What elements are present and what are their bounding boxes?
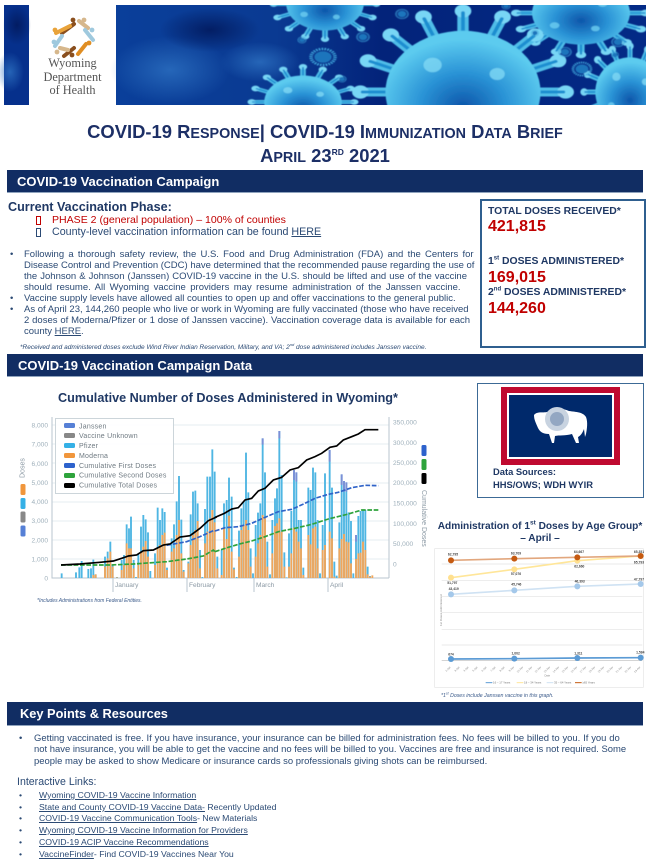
section bar: vaccination campaign: COVID-19 Vaccination Campaign (17, 174, 219, 189)
date axis labels: 9-Apr (508, 665, 515, 673)
right axis labels (393, 420, 417, 568)
bullet text (10, 249, 474, 337)
data sources text: HHS/OWS; WDH WYIR (493, 479, 593, 490)
legend: Cumulative Total Doses (79, 482, 158, 490)
first doses administered (488, 255, 624, 286)
series: 18 to 34 years (448, 553, 644, 581)
left axis labels: 5,000 (31, 480, 48, 487)
month labels: April (330, 582, 344, 589)
total doses received: TOTAL DOSES RECEIVED* (488, 206, 621, 217)
data labels: 45,746 (511, 583, 522, 587)
month labels: March (256, 582, 275, 589)
legend: Pfizer (79, 443, 99, 450)
panel: interactive links (19, 790, 276, 859)
legend: Vaccine Unknown (79, 433, 138, 440)
series: 35 to 64 years (448, 581, 644, 597)
daily dose bars, left half (62, 449, 215, 578)
data labels: 1,584 (636, 651, 645, 655)
panel: interactive links: COVID-19 ACIP Vaccine Recommendations (39, 837, 209, 847)
right axis labels: 200,000 (393, 480, 417, 487)
right axis labels: 100,000 (393, 521, 417, 528)
date axis labels: 2-Apr (444, 665, 452, 673)
age chart footnote: *1st Doses include Janssen vaccine in this graph. (441, 691, 554, 699)
date axis labels: 20-Apr (606, 665, 614, 674)
combined bar and line chart (20, 417, 428, 592)
title: COVID-19 RESPONSE| COVID-19 IMMUNIZATION DATA BRIEF (87, 121, 563, 142)
month labels: January (115, 582, 139, 589)
date axis labels: 16-Apr (570, 665, 578, 674)
section bar: campaign data (7, 354, 643, 377)
right axis title and swatches (420, 445, 427, 547)
banner (0, 5, 646, 105)
right axis labels: 0 (393, 562, 397, 568)
panel: interactive links: • (19, 849, 22, 859)
date axis labels: 14-Apr (552, 665, 560, 674)
y axis title: 1st Doses Administered (439, 594, 443, 626)
second doses administered: 2nd DOSES ADMINISTERED* (488, 287, 626, 298)
date axis labels: 5-Apr (471, 665, 479, 673)
phase list item: PHASE 2 (general population) – 100% of counties (52, 214, 286, 226)
chart title: Cumulative Number of Doses Administered in Wyoming* (58, 391, 398, 405)
date axis labels: 17-Apr (579, 665, 587, 674)
date axis labels: 22-Apr (624, 665, 632, 674)
age group line chart (434, 548, 645, 688)
date axis labels: 4-Apr (462, 665, 470, 673)
age legend: 16 – 17 Years (493, 681, 511, 685)
left axis labels: 3,000 (31, 518, 48, 525)
cumulative lines, right half (215, 430, 378, 552)
date axis labels: 6-Apr (480, 665, 488, 673)
bullet text: Disease Control and Prevention (CDC) have determined that the recommended pause regarding the use of (24, 260, 474, 271)
age group chart title: Administration of 1st Doses by Age Group* (438, 520, 642, 532)
panel: key point text: not have insurance, you will be able to get the vaccine and no fees will be billed to you. Vaccines are free and insurance is not required. Some (34, 744, 626, 755)
right axis title and swatches: Cumulative Doses (420, 490, 427, 547)
panel: interactive links: • (19, 825, 22, 835)
panel: interactive links: VaccineFinder- Find COVID-19 Vaccines Near You (39, 849, 234, 859)
left axis title and swatches: Doses (20, 458, 26, 478)
left axis labels: 8,000 (31, 422, 48, 430)
date axis labels: 13-Apr (543, 665, 551, 674)
date axis labels: 8-Apr (498, 665, 506, 673)
series: 16 to 17 years (448, 655, 644, 662)
data labels: 64,667 (574, 550, 584, 554)
date axis labels: 15-Apr (561, 665, 569, 674)
date axis labels: 21-Apr (615, 665, 623, 674)
phase heading: Current Vaccination Phase: (8, 200, 172, 214)
date axis labels: 10-Apr (516, 665, 524, 674)
date axis labels: 11-Apr (525, 665, 533, 674)
panel: interactive links: Wyoming COVID-19 Vaccine Information for Providers (39, 825, 248, 835)
panel: key point text: people may be asked to show Medicare or insurance cards so professionals giving shots can be reimbursed. (34, 756, 487, 767)
panel: interactive links: • (19, 813, 22, 823)
title: APRIL 23RD 2021 (260, 145, 390, 166)
panel: key point text (19, 733, 626, 767)
right axis labels: 250,000 (393, 460, 417, 467)
data labels: 65,351 (634, 550, 644, 554)
legend (56, 418, 174, 494)
first doses administered: 169,015 (488, 269, 546, 286)
data labels: 1,311 (574, 651, 583, 655)
left axis title and swatches (20, 458, 26, 536)
bullet text: Vaccine supply levels have allowed all counties to open up and offer vaccinations to the general public. (24, 293, 456, 304)
bullet text: • (10, 249, 13, 260)
cumulative lines, left half (61, 517, 217, 565)
left axis labels (31, 422, 48, 582)
series: 65 and older (448, 553, 644, 563)
panel: interactive links: COVID-19 Vaccine Communication Tools- New Materials (39, 813, 257, 823)
panel: current vaccination phase (8, 200, 474, 351)
data labels: 62,795 (448, 552, 458, 556)
bullet text: Following a thorough safety review, the U.S. Food and Drug Administration (FDA) and the Centers for (24, 249, 474, 260)
daily dose bars, right half (217, 431, 372, 578)
section bar: campaign data: COVID-19 Vaccination Campaign Data (18, 358, 252, 373)
logo wordmark: Wyoming (48, 56, 97, 70)
age legend: 35 – 64 Years (554, 681, 572, 685)
data labels: 57,076 (511, 572, 521, 576)
bullet text: As of April 23, 144,260 people who live or work in Wyoming are fully vaccinated (those who have received (24, 304, 469, 315)
data labels (447, 550, 645, 656)
footnote: *Received and administered doses exclude Wind River Indian Reservation, Military, and VA; 2nd dose administered includes Janssen vaccine. (20, 342, 426, 351)
bullet text: • (10, 304, 13, 315)
panel: interactive links: • (19, 837, 22, 847)
date axis labels: 12-Apr (534, 665, 542, 674)
section bar: vaccination campaign (7, 170, 643, 193)
panel: flag and data sources (477, 383, 644, 498)
title (87, 121, 563, 166)
left strip (0, 5, 31, 105)
chart footnote: *Includes Administrations from Federal Entities. (37, 598, 142, 604)
legend: Janssen (79, 424, 107, 430)
panel: interactive links: Wyoming COVID-19 Vaccine Information (39, 790, 196, 800)
county info list item: County-level vaccination information can be found HERE (52, 226, 321, 238)
right axis labels: 300,000 (393, 440, 417, 447)
data labels: 43,419 (449, 587, 459, 591)
section bar: key points (7, 702, 643, 726)
panel: dose totals (480, 199, 646, 348)
right axis labels: 350,000 (393, 420, 417, 426)
data labels: 51,797 (447, 581, 458, 585)
bullet text: 2 doses of Moderna/Pfizer or 1 dose of Janssen vaccine). Vaccination coverage data is available for each (24, 315, 470, 326)
data labels: 65,793 (634, 560, 644, 564)
date axis labels: 3-Apr (453, 665, 461, 673)
age legend (486, 681, 595, 685)
data labels: 1,002 (511, 652, 520, 656)
panel: key point text: • (19, 733, 22, 744)
left axis labels: 6,000 (31, 461, 48, 468)
first doses administered: 1st DOSES ADMINISTERED* (488, 256, 624, 267)
logo wordmark: of Health (49, 83, 96, 97)
data labels: 47,797 (634, 577, 644, 581)
left axis labels: 1,000 (31, 556, 48, 564)
data labels: 674 (448, 652, 454, 656)
left axis labels: 4,000 (31, 499, 48, 506)
age group chart title: – April – (520, 532, 560, 544)
panel: key point text: Getting vaccinated is free. If you have insurance, your insurance can be billed for administration fees. No fees will be billed to you. If you do (34, 733, 620, 744)
data sources text: Data Sources: (493, 466, 556, 477)
legend: Cumulative First Doses (79, 463, 156, 470)
date axis labels: 23-Apr (633, 665, 641, 674)
data sources text (493, 466, 593, 490)
legend: Moderna (79, 453, 108, 460)
date axis labels: 7-Apr (489, 665, 497, 673)
legend: Cumulative Second Doses (79, 472, 167, 480)
interactive links heading: Interactive Links: (17, 776, 96, 788)
date axis labels: 19-Apr (597, 665, 605, 674)
logo wordmark (43, 56, 102, 97)
second doses administered: 144,260 (488, 300, 546, 317)
main banner image (113, 5, 646, 105)
total doses received: 421,815 (488, 218, 546, 235)
right axis labels: 50,000 (393, 541, 414, 548)
left axis labels: 0 (44, 576, 48, 582)
month labels: February (189, 582, 216, 589)
bullet text: the Johnson & Johnson (Janssen) COVID-19 vaccine in the U.S. should be lifted and use of the vaccine (24, 271, 467, 282)
right axis labels: 150,000 (393, 500, 417, 508)
age legend: 18 – 34 Years (524, 681, 542, 685)
panel: interactive links: • (19, 790, 22, 800)
age legend: ≥65 Years (582, 681, 595, 685)
age group chart title (438, 520, 642, 544)
date axis labels: 18-Apr (588, 665, 596, 674)
total doses received (488, 206, 621, 235)
logo mark (52, 18, 94, 57)
second doses administered (488, 286, 626, 317)
icon: Wyoming flag (501, 387, 620, 465)
data labels: 63,709 (511, 551, 521, 555)
date axis labels (444, 665, 641, 674)
panel: interactive links: • (19, 802, 22, 812)
data labels: 46,393 (575, 580, 585, 584)
date axis title: Date (545, 674, 551, 678)
data labels: 62,660 (574, 564, 585, 568)
left axis labels: 2,000 (31, 538, 48, 544)
bullet text: • (10, 293, 13, 304)
month labels (115, 582, 344, 589)
logo wordmark: Department (43, 70, 102, 84)
section bar: key points: Key Points & Resources (20, 706, 168, 721)
panel: interactive links: State and County COVID-19 Vaccine Data- Recently Updated (39, 802, 276, 812)
bullet text: county HERE. (24, 326, 84, 337)
bullet text: should resume. All Wyoming vaccine providers may resume administration of the Janssen vaccine. (24, 282, 461, 293)
left axis labels: 7,000 (31, 442, 48, 448)
